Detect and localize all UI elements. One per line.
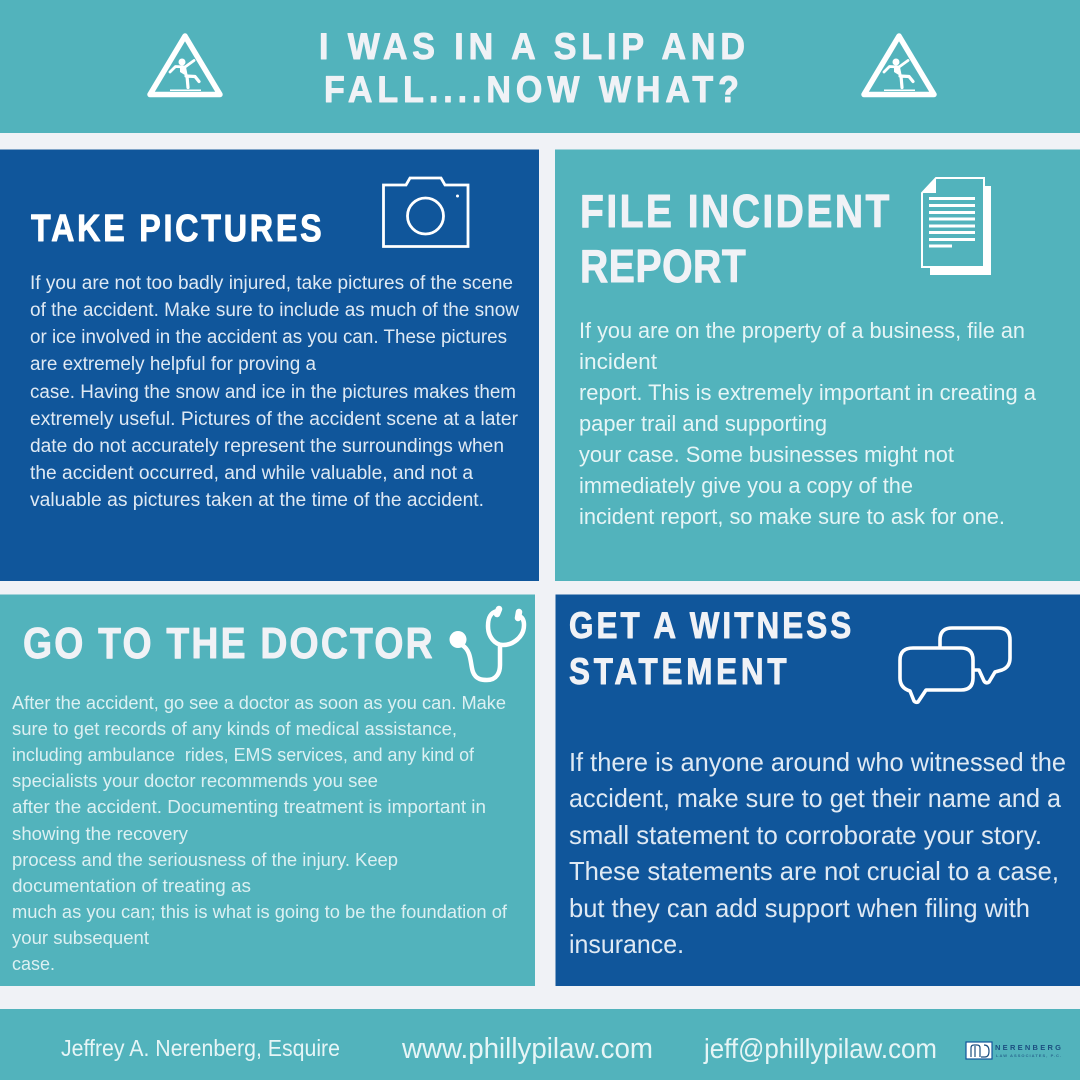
- icon: speech bubbles: [900, 628, 1010, 702]
- body text: take pictures: valuable as pictures taken at the time of the accident.: [30, 489, 484, 511]
- body text: take pictures: or ice involved in the accident as you can. These pictures: [30, 326, 507, 348]
- body text: go to the doctor: specialists your doctor recommends you see: [12, 770, 378, 791]
- logo: Nerenberg Law Associates: LAW ASSOCIATES, P.C.: [996, 1053, 1061, 1058]
- body text: take pictures: the accident occurred, and while valuable, and not a: [30, 462, 473, 484]
- body text: file incident report: immediately give you a copy of the: [579, 473, 913, 498]
- body text: go to the doctor: [12, 692, 508, 974]
- body text: file incident report: [579, 318, 1037, 529]
- contact: email: jeff@phillypilaw.com: [703, 1033, 937, 1064]
- title: [319, 26, 745, 110]
- logo: Nerenberg Law Associates: NERENBERG: [995, 1043, 1061, 1052]
- body text: go to the doctor: process and the seriousness of the injury. Keep: [12, 849, 398, 870]
- icon: camera: [384, 178, 468, 246]
- body text: take pictures: If you are not too badly injured, take pictures of the scene: [30, 272, 513, 294]
- heading: get a witness statement: [569, 606, 851, 693]
- panel: file incident report: [555, 150, 1080, 581]
- body text: get a witness statement: accident, make sure to get their name and a: [569, 783, 1062, 813]
- body text: go to the doctor: case.: [12, 953, 55, 974]
- body text: get a witness statement: [569, 747, 1066, 959]
- icon: left wet floor warning: [150, 36, 220, 94]
- icon: stethoscope: [450, 609, 524, 680]
- body text: go to the doctor: including ambulance rides, EMS services, and any kind of: [12, 744, 475, 765]
- heading: take pictures: TAKE PICTURES: [31, 208, 322, 250]
- body text: take pictures: are extremely helpful for proving a: [30, 353, 316, 375]
- contact: website: www.phillypilaw.com: [401, 1033, 653, 1065]
- body text: go to the doctor: much as you can; this is what is going to be the foundation of: [12, 901, 508, 922]
- heading: file incident report: [580, 186, 889, 293]
- body text: get a witness statement: small statement to corroborate your story.: [569, 820, 1042, 850]
- body text: go to the doctor: sure to get records of any kinds of medical assistance,: [12, 718, 457, 739]
- footer band: [0, 1009, 1080, 1080]
- body text: take pictures: [30, 272, 520, 511]
- body text: get a witness statement: insurance.: [569, 929, 684, 959]
- body text: take pictures: of the accident. Make sure to include as much of the snow: [30, 299, 520, 321]
- body text: get a witness statement: If there is anyone around who witnessed the: [569, 747, 1066, 777]
- body text: go to the doctor: After the accident, go see a doctor as soon as you can. Make: [12, 692, 506, 713]
- header band: [0, 0, 1080, 133]
- body text: file incident report: paper trail and supporting: [579, 411, 827, 436]
- heading: go to the doctor: GO TO THE DOCTOR: [23, 618, 433, 668]
- heading: file incident report: REPORT: [580, 241, 746, 293]
- body text: go to the doctor: showing the recovery: [12, 823, 189, 844]
- contact: name: Jeffrey A. Nerenberg, Esquire: [61, 1035, 340, 1061]
- title: I WAS IN A SLIP AND: [319, 26, 745, 67]
- title: FALL....NOW WHAT?: [324, 69, 739, 110]
- body text: file incident report: If you are on the property of a business, file an: [579, 318, 1025, 343]
- body text: go to the doctor: your subsequent: [12, 927, 150, 948]
- icon: document: [921, 178, 991, 275]
- body text: get a witness statement: but they can add support when filing with: [569, 893, 1030, 923]
- panel: go to the doctor: [0, 594, 535, 986]
- panel: get a witness statement: [556, 594, 1080, 986]
- body text: take pictures: extremely useful. Pictures of the accident scene at a later: [30, 408, 518, 430]
- panel: take pictures: [0, 150, 539, 581]
- body text: go to the doctor: after the accident. Documenting treatment is important in: [12, 796, 486, 817]
- body text: get a witness statement: These statements are not crucial to a case,: [569, 856, 1059, 886]
- body text: take pictures: case. Having the snow and ice in the pictures makes them: [30, 381, 516, 403]
- body text: file incident report: your case. Some businesses might not: [579, 442, 955, 467]
- body text: file incident report: incident: [579, 349, 658, 374]
- icon: right wet floor warning: [864, 36, 934, 94]
- body text: file incident report: report. This is extremely important in creating a: [579, 380, 1037, 405]
- heading: get a witness statement: STATEMENT: [569, 652, 787, 693]
- body text: file incident report: incident report, so make sure to ask for one.: [579, 504, 1005, 529]
- heading: get a witness statement: GET A WITNESS: [569, 606, 851, 647]
- heading: file incident report: FILE INCIDENT: [580, 186, 889, 238]
- logo: Nerenberg Law Associates: [966, 1042, 1061, 1059]
- body text: go to the doctor: documentation of treating as: [12, 875, 251, 896]
- body text: take pictures: date do not accurately represent the surroundings when: [30, 435, 504, 457]
